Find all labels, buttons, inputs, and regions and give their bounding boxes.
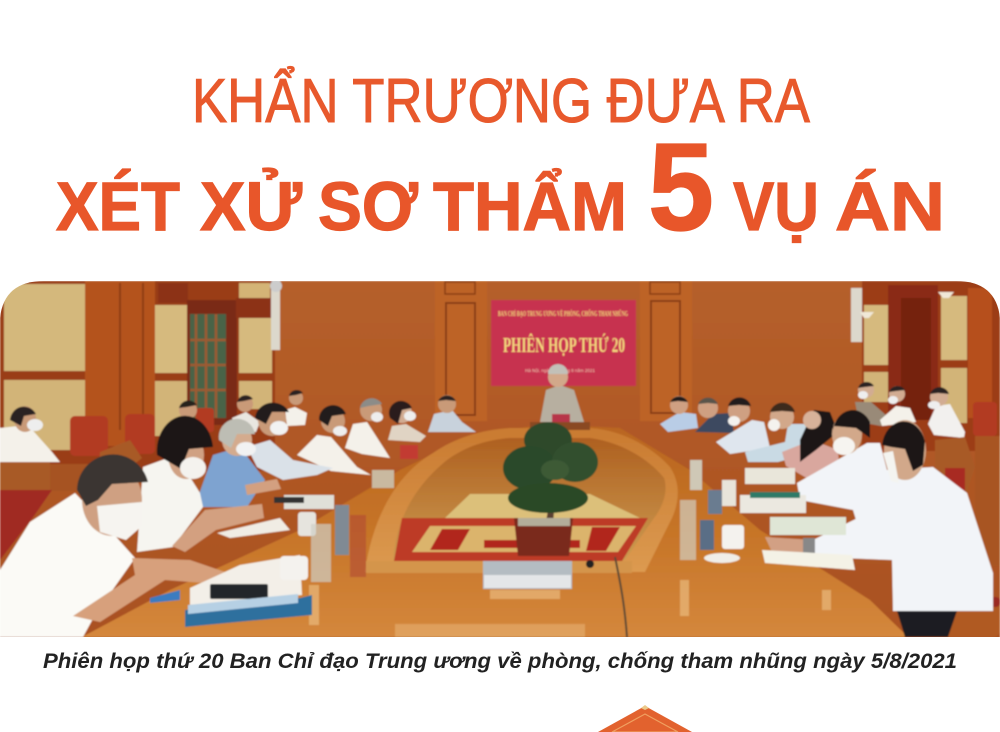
documents and desk items, left (150, 445, 418, 627)
wall pillars (435, 281, 692, 421)
title line 2: SƠ (318, 168, 418, 245)
back row chairs (70, 402, 997, 456)
attendee E (782, 410, 840, 480)
title line 2: THẨM (433, 168, 627, 245)
gold floor (445, 494, 640, 518)
banner: Phiên họp thứ 20: PHIÊN HỌP THỨ 20 (503, 333, 625, 357)
attendee C (716, 397, 770, 454)
attendee 8 (428, 395, 476, 432)
attendee 1 (0, 454, 225, 637)
attendee G (765, 420, 993, 637)
banner: Phiên họp thứ 20: BAN CHỈ ĐẠO TRUNG ƯƠNG VỀ PHÒNG, CHỐNG THAM NHŨNG (498, 308, 628, 318)
title line 2: VỤ (733, 168, 819, 245)
attendee F (796, 409, 888, 520)
right side attendees (660, 396, 993, 637)
attendee 7 (388, 401, 426, 442)
conference table (82, 424, 908, 637)
attendee B (695, 398, 734, 433)
back row attendees (0, 382, 965, 462)
attendee 4 (247, 403, 333, 480)
left wallpaper wall (0, 280, 282, 471)
banner: Phiên họp thứ 20 (491, 300, 636, 386)
title line 2 (56, 119, 945, 257)
title line 2: ÁN (835, 168, 945, 245)
speaker (530, 364, 590, 430)
table reflections (309, 580, 831, 637)
diamond badge (598, 705, 692, 732)
documents and desk items, right (680, 460, 855, 570)
meeting room photo (0, 280, 1000, 641)
attendee A (660, 396, 698, 432)
left side attendees (0, 395, 476, 637)
well rim (365, 428, 678, 572)
left foreground chairs (0, 440, 142, 560)
caption: Phiên họp thứ 20 Ban Chỉ đạo Trung ương về phòng, chống tham nhũng ngày 5/8/2021 (43, 649, 957, 673)
microphone base (483, 557, 627, 637)
title line 2: 5 (648, 119, 714, 257)
title (56, 67, 945, 257)
attendee 5 (297, 405, 371, 475)
attendee 2 (137, 416, 264, 552)
title line 1: KHẨN TRƯƠNG ĐƯA RA (192, 67, 811, 136)
banner: Phiên họp thứ 20: Hà Nội, ngày 05 tháng 8 năm 2021 (525, 368, 595, 373)
attendee 3 (197, 419, 281, 507)
bonsai tree (503, 422, 598, 556)
rim front edge (366, 572, 632, 574)
red carpet (394, 518, 648, 561)
attendee D (745, 403, 810, 462)
right side chairs and cabinet (935, 436, 1000, 637)
inner well of the table (365, 428, 678, 573)
well interior wood (393, 438, 666, 560)
wood wall (0, 281, 1000, 641)
title line 2: XỬ (200, 168, 303, 245)
right wallpaper wall (851, 281, 1000, 451)
attendee 6 (345, 398, 390, 458)
title line 2: XÉT (56, 168, 180, 245)
